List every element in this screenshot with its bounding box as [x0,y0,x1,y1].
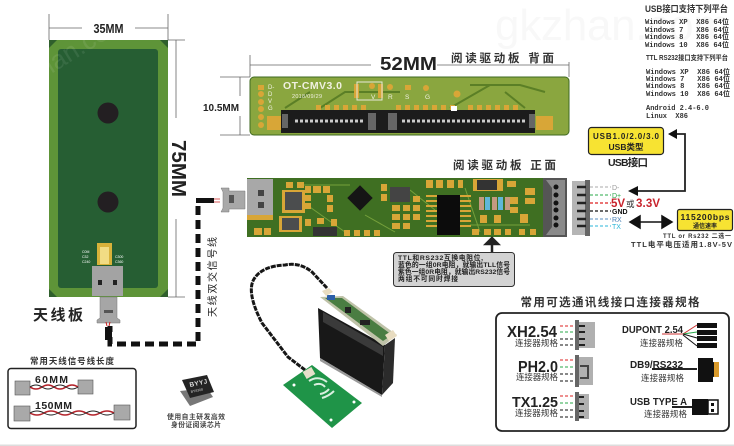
callout: resistor note [394,252,514,286]
panel: antenna board: C300 [115,255,123,259]
dimension: 52MM: 52MM [380,54,437,74]
connector: TX1.25: TX1.25 [512,394,558,411]
dimension: 52MM [250,54,569,77]
text block: supported platforms: Windows 8 X86 64位 [646,81,730,91]
connector: TX1.25 [512,392,589,421]
connector: XH2.54: 连接器规格 [515,338,558,348]
cable connector with pin labels: 3.3V [636,198,660,210]
dashed antenna signal cable [110,206,198,344]
connector: PH2.0 [516,355,593,387]
panel: reader board front [247,178,543,237]
antenna plug on front board [196,188,245,212]
arrow: to resistor position [486,238,498,252]
text block: chip caption [167,412,225,429]
connector: DB9 RS232: 连接器规格 [641,373,684,383]
cable connector with pin labels: RX [612,217,622,224]
connector: TX1.25: 连接器规格 [515,408,558,418]
panel: reader board back: OT-CMV3.0 [283,80,342,92]
panel: antenna board: C0M [82,250,89,254]
panel: antenna cable lengths [8,368,136,428]
text block: supported platforms: Windows 10 X86 64位 [645,40,729,50]
cable connector with pin labels: 或 [626,199,635,209]
cable connector with pin labels [572,180,660,236]
panel: antenna board: C360 [115,260,123,264]
connector: DB9 RS232 [630,358,719,383]
cable connector with pin labels: GND [612,209,628,216]
antenna card [283,365,362,428]
callout: baud rate: 115200bps [680,212,730,222]
connector: PH2.0: 连接器规格 [516,372,558,382]
panel: reader board back: V [371,94,376,101]
text block: supported platforms: Windows 10 X86 64位 [646,89,730,99]
connector: PH2.0: PH2.0 [518,359,558,376]
text block: supported platforms: Android 2.4-6.0 [646,105,709,113]
cable connector with pin labels: D- [612,185,620,192]
text block: supported platforms: Windows XP X86 64位 [645,17,729,27]
panel: antenna board: glzhan.com [3,5,132,101]
connector: XH2.54: XH2.54 [507,324,557,341]
heading: reader board front: 阅读驱动板 正面 [453,158,556,172]
callout: baud rate [678,210,732,230]
cable connector with pin labels: D+ [612,193,621,200]
text block: supported platforms: Windows 7 X86 64位 [646,74,730,84]
text block: supported platforms: USB接口支持下列平台 [645,3,728,14]
connector: DuPont 2.54 [622,323,717,348]
connector: USB type A [630,397,718,419]
panel: antenna board: C240 [82,260,90,264]
panel: reader board back: D [268,92,273,98]
connector: XH2.54 [507,320,595,350]
cable connector with pin labels: 5V [611,198,625,210]
text block: chip caption: 使用自主研发高效 [167,412,225,421]
icon: chip: BYYJ [189,378,208,389]
bottom band [0,444,734,446]
panel: reader board back [250,77,569,135]
label: USB port: USB接口 [608,156,648,169]
panel: antenna cable lengths: 60MM [35,374,68,386]
callout: resistor note: 两组不可同时焊接 [398,274,458,283]
connector: USB type A: 连接器规格 [644,409,687,419]
antenna connector [92,266,123,340]
dimension: 10.5MM [203,77,250,135]
heading: connector specs: 常用可选通讯线接口连接器规格 [520,295,700,309]
panel: reader board back: R [388,94,393,101]
panel: reader board back: G [425,94,430,101]
dimension: 75MM: 75MM [167,140,189,197]
dimension: 10.5MM: 10.5MM [203,102,239,114]
callout: resistor note: 紫色一组0R电阻，就输出RS232信号 [398,267,510,276]
dimension: 35MM: 35MM [94,22,124,36]
label: antenna signal cable: 天线双交信号线 [206,237,219,317]
heading: reader board back: 阅读驱动板 背面 [451,51,554,65]
callout: USB type: USB类型 [609,142,644,152]
callout: USB type [588,128,664,154]
heading: antenna cable lengths: 常用天线信号线长度 [30,356,114,366]
panel: reader board back: V [268,99,272,105]
callout: baud rate: 通信速率 [693,222,717,230]
text block: TTL voltage [631,232,732,249]
panel: antenna board [3,5,168,340]
text block: supported platforms: Linux X86 [646,113,688,121]
text block: supported platforms [645,3,730,121]
panel: reader board back: S [405,94,410,101]
arrow: USB type to data pins [628,129,685,196]
panel: reader board back: G [268,106,273,112]
connector: DuPont 2.54: DUPONT 2.54 [622,325,683,336]
dimension: 75MM [167,40,189,297]
dimension: 35MM [49,14,168,40]
callout: resistor note: TTL和RS232互换电阻位, [398,253,483,262]
connector: DuPont 2.54: 连接器规格 [640,338,683,348]
front board right connector [543,178,567,237]
usb socket [247,179,273,235]
panel: reader board back: 2018/09/29 [292,94,322,100]
connector: USB type A: USB TYPE A [630,397,687,408]
text block: TTL voltage: TTL or Rs232 二选一 [663,232,731,240]
panel: reader board back: D- [268,85,274,91]
callout: resistor note: 蓝色的一组0R电阻，就输出TLL信号 [398,260,510,269]
text block: chip caption: 身份证阅读芯片 [171,420,221,429]
text block: TTL voltage: TTL电平电压适用1.8V-5V [631,239,732,249]
arrow: baud rate double arrow [630,216,672,228]
callout: USB type: USB1.0/2.0/3.0 [593,132,660,141]
label: antenna board: 天线板 [33,306,83,324]
text block: supported platforms: Windows 8 X86 64位 [645,32,729,42]
photo: reader module with antenna card [251,264,397,428]
connector: DB9 RS232: DB9/RS232 [630,360,683,371]
icon: chip: BY8308 [190,387,203,394]
panel: antenna board: C32 [82,255,88,259]
text block: supported platforms: Windows 7 X86 64位 [645,25,729,35]
panel: connector specs [496,313,729,431]
watermark: gkzhan.com [495,1,730,50]
panel: antenna cable lengths: 150MM [35,400,72,412]
text block: supported platforms: Windows XP X86 64位 [646,67,730,77]
icon: chip [180,375,214,406]
cable connector with pin labels: TX [612,224,621,231]
